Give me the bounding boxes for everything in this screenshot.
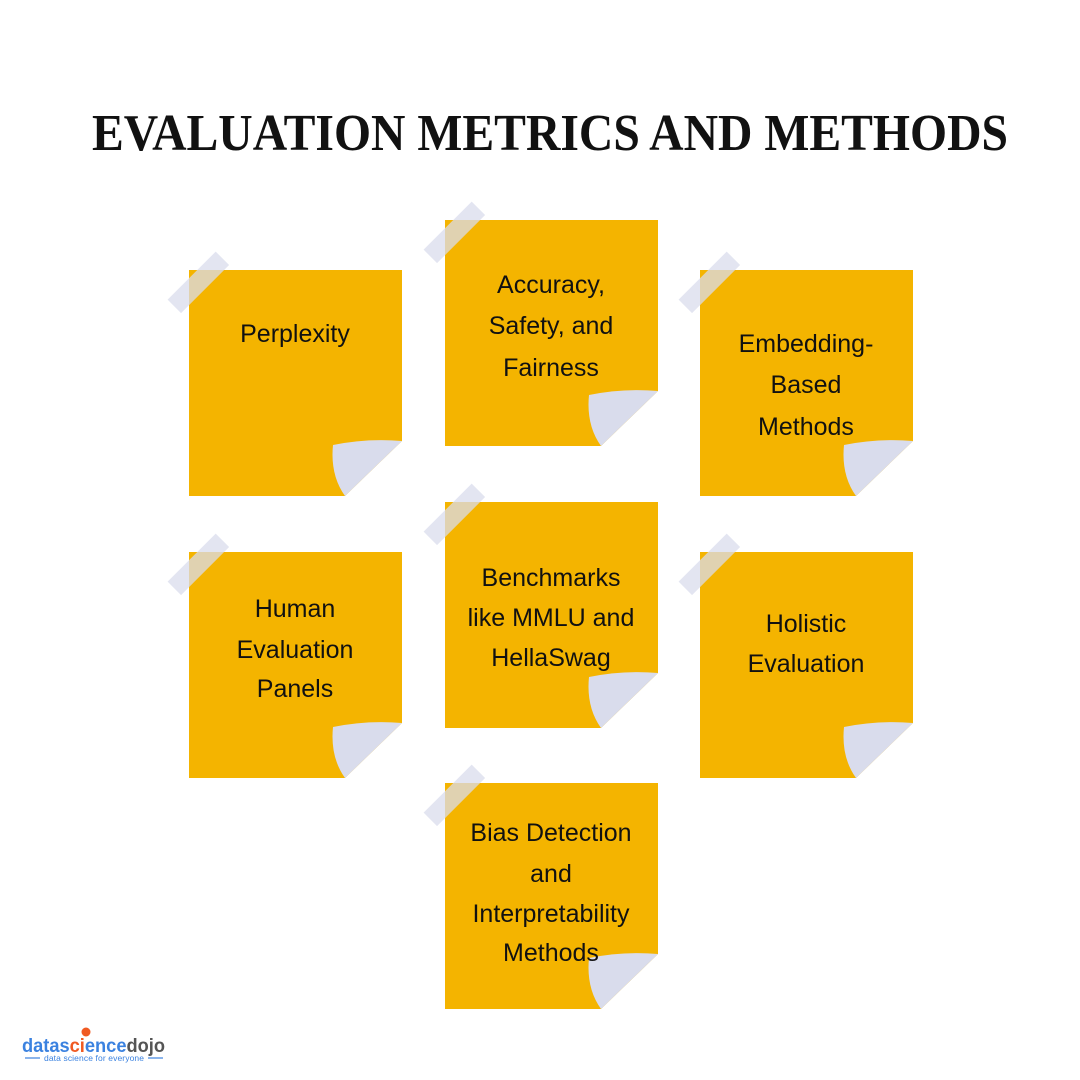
note: Human Evaluation Panels: Human	[255, 595, 335, 623]
note: Bias Detection and Interpretability Methods: Interpretability	[472, 900, 630, 928]
note: Accuracy, Safety, and Fairness	[424, 202, 658, 446]
logo: datasciencedojo	[22, 1036, 165, 1057]
note: Benchmarks like MMLU and HellaSwag: Benchmarks	[482, 564, 620, 592]
note: Accuracy, Safety, and Fairness: Accuracy,	[497, 271, 605, 299]
note: Perplexity	[168, 252, 402, 496]
logo: data science for everyone	[44, 1053, 144, 1063]
note: Embedding-Based Methods: Methods	[758, 413, 854, 441]
note: Bias Detection and Interpretability Methods: Bias Detection	[470, 819, 632, 847]
note: Human Evaluation Panels: Panels	[257, 675, 333, 703]
note: Embedding-Based Methods: Based	[771, 371, 841, 399]
note: Holistic Evaluation	[679, 534, 913, 778]
note: Accuracy, Safety, and Fairness: Fairness	[503, 354, 599, 382]
note: Human Evaluation Panels: Evaluation	[237, 636, 353, 664]
note: Holistic Evaluation: Holistic	[766, 610, 846, 638]
note: Bias Detection and Interpretability Methods	[424, 765, 658, 1009]
logo	[22, 1028, 165, 1063]
note: Holistic Evaluation: Evaluation	[748, 650, 864, 678]
note: Perplexity: Perplexity	[240, 320, 350, 348]
note: Accuracy, Safety, and Fairness: Safety, and	[489, 312, 613, 340]
note: Benchmarks like MMLU and HellaSwag: HellaSwag	[491, 644, 611, 672]
title: EVALUATION METRICS AND METHODS	[92, 105, 1008, 162]
note: Embedding-Based Methods	[679, 252, 913, 496]
note: Bias Detection and Interpretability Methods: Methods	[503, 939, 599, 967]
note: Benchmarks like MMLU and HellaSwag: like MMLU and	[468, 604, 634, 632]
note: Bias Detection and Interpretability Methods: and	[530, 860, 572, 888]
note: Human Evaluation Panels	[168, 534, 402, 778]
note: Embedding-Based Methods: Embedding-	[739, 330, 873, 358]
note: Benchmarks like MMLU and HellaSwag	[424, 484, 658, 728]
